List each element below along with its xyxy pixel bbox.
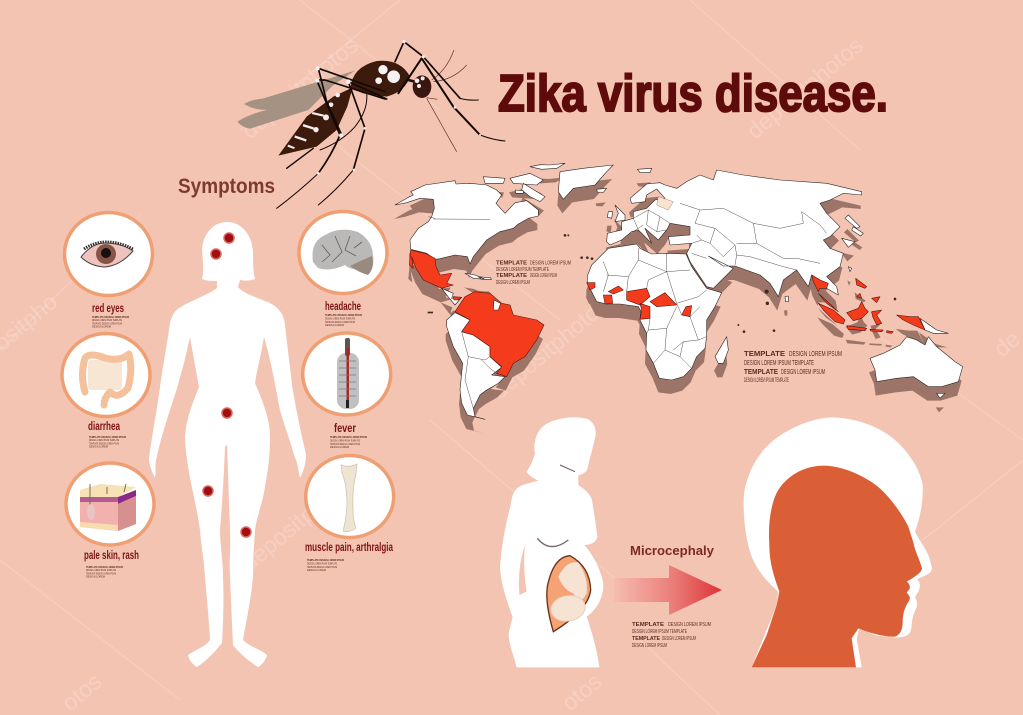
symptom: headache: TEMPLATE DESIGN LOREM IPSUM — [325, 320, 355, 324]
symptom: fever: DESIGN LOREM — [330, 445, 349, 449]
icon: intestine — [82, 354, 131, 405]
icon: mosquito — [237, 40, 505, 208]
symptom: headache: DESIGN LOREM — [325, 323, 344, 327]
map legend text: indian ocean: DESIGN LOREM IPSUM TEMPLATE — [744, 378, 789, 384]
title: Zika virus disease. — [498, 65, 888, 123]
map legend text: atlantic: DESIGN LOREM IPSUM TEMPLATE — [496, 267, 549, 273]
symptom: pale skin, rash: DESIGN LOREM IPSUM TEMPLATE — [86, 568, 116, 572]
symptom: fever: fever — [334, 421, 356, 435]
symptom: red eyes: TEMPLATE DESIGN LOREM IPSUM — [92, 322, 122, 326]
map legend text: indian ocean: DESIGN LOREM IPSUM TEMPLATE — [744, 360, 814, 367]
map legend text: indian ocean: DESIGN LOREM IPSUM — [789, 351, 842, 358]
symptom: diarrhea: TEMPLATE DESIGN LOREM IPSUM — [89, 442, 119, 446]
symptom: fever: TEMPLATE DESIGN LOREM IPSUM — [330, 435, 367, 439]
symptom: muscle pain, arthralgia: muscle pain, arthralgia — [305, 540, 393, 554]
icon: eye — [81, 242, 133, 267]
heading: symptoms: Symptoms — [178, 175, 275, 198]
watermark pattern: depositphotos — [487, 292, 613, 404]
symptom: pale skin, rash: TEMPLATE DESIGN LOREM IPSUM — [86, 572, 116, 576]
map legend text: atlantic: DESIGN LOREM IPSUM — [496, 280, 530, 286]
symptom: muscle pain, arthralgia: DESIGN LOREM IPSUM TEMPLATE — [307, 562, 337, 566]
icon: brain — [312, 230, 373, 275]
symptom: diarrhea: TEMPLATE DESIGN LOREM IPSUM — [89, 435, 126, 439]
icon: thermometer — [337, 338, 359, 409]
womb with fetus — [547, 556, 591, 632]
symptom: headache: DESIGN LOREM IPSUM TEMPLATE — [325, 316, 355, 320]
symptom: muscle pain, arthralgia — [305, 456, 394, 572]
map legend text: atlantic: DESIGN LOREM IPSUM — [530, 273, 557, 279]
watermark pattern: otos — [557, 668, 607, 715]
symptom: fever — [303, 333, 391, 449]
map legend text: atlantic — [496, 260, 571, 286]
map legend text: atlantic: TEMPLATE — [496, 273, 527, 279]
symptom: pale skin, rash: pale skin, rash — [84, 548, 139, 562]
map legend text: atlantic: DESIGN LOREM IPSUM — [530, 260, 571, 266]
symptom: red eyes: DESIGN LOREM — [92, 324, 111, 328]
microcephaly text block: DESIGN LOREM IPSUM — [632, 643, 667, 649]
symptom: headache: TEMPLATE DESIGN LOREM IPSUM — [325, 313, 362, 317]
symptom: red eyes: TEMPLATE DESIGN LOREM IPSUM — [92, 315, 129, 319]
map legend text: indian ocean — [744, 351, 842, 384]
map legend text: atlantic: TEMPLATE — [496, 260, 527, 266]
symptom: red eyes — [64, 212, 152, 328]
head profile: microcephaly comparison — [744, 417, 932, 667]
icon: skin cross-section — [80, 484, 136, 531]
symptom: pale skin, rash: TEMPLATE DESIGN LOREM IPSUM — [86, 565, 123, 569]
microcephaly text block: DESIGN LOREM IPSUM — [662, 636, 696, 642]
microcephaly text block — [632, 622, 711, 649]
microcephaly text block: DESIGN LOREM IPSUM TEMPLATE — [632, 629, 687, 635]
symptom: headache: headache — [325, 299, 361, 313]
symptom: muscle pain, arthralgia: TEMPLATE DESIGN LOREM IPSUM — [307, 565, 337, 569]
label: microcephaly: Microcephaly — [630, 543, 715, 558]
symptom: pale skin, rash — [66, 463, 154, 578]
arrow — [614, 565, 722, 615]
microcephaly text block: DESIGN LOREM IPSUM — [668, 622, 711, 628]
map legend text: indian ocean: TEMPLATE — [744, 369, 778, 376]
pregnant woman — [500, 417, 603, 667]
symptom: diarrhea: diarrhea — [88, 419, 120, 433]
symptom: fever: DESIGN LOREM IPSUM TEMPLATE — [330, 438, 360, 442]
symptom: red eyes: DESIGN LOREM IPSUM TEMPLATE — [92, 318, 122, 322]
watermark pattern: depositphotos — [742, 32, 868, 144]
symptom: diarrhea: DESIGN LOREM IPSUM TEMPLATE — [89, 438, 119, 442]
map legend text: indian ocean: DESIGN LOREM IPSUM — [781, 369, 825, 376]
symptom: headache — [299, 212, 387, 327]
symptom: pale skin, rash: DESIGN LOREM — [86, 574, 105, 578]
body silhouette with symptom points — [149, 222, 306, 667]
symptom: diarrhea — [62, 334, 150, 448]
map legend text: indian ocean: TEMPLATE — [744, 351, 785, 358]
symptom: diarrhea: DESIGN LOREM — [89, 444, 108, 448]
microcephaly text block: TEMPLATE — [632, 636, 660, 642]
microcephaly text block: TEMPLATE — [632, 622, 664, 628]
icon: bone — [341, 464, 357, 532]
symptom: muscle pain, arthralgia: DESIGN LOREM — [307, 568, 326, 572]
symptom: fever: TEMPLATE DESIGN LOREM IPSUM — [330, 442, 360, 446]
world map — [394, 163, 963, 433]
symptom: muscle pain, arthralgia: TEMPLATE DESIGN LOREM IPSUM — [307, 558, 344, 562]
watermark pattern: depositphotos — [237, 464, 363, 576]
watermark pattern: depositphotos — [237, 32, 363, 144]
symptom: red eyes: red eyes — [92, 301, 124, 315]
watermark pattern: otos — [57, 668, 107, 715]
